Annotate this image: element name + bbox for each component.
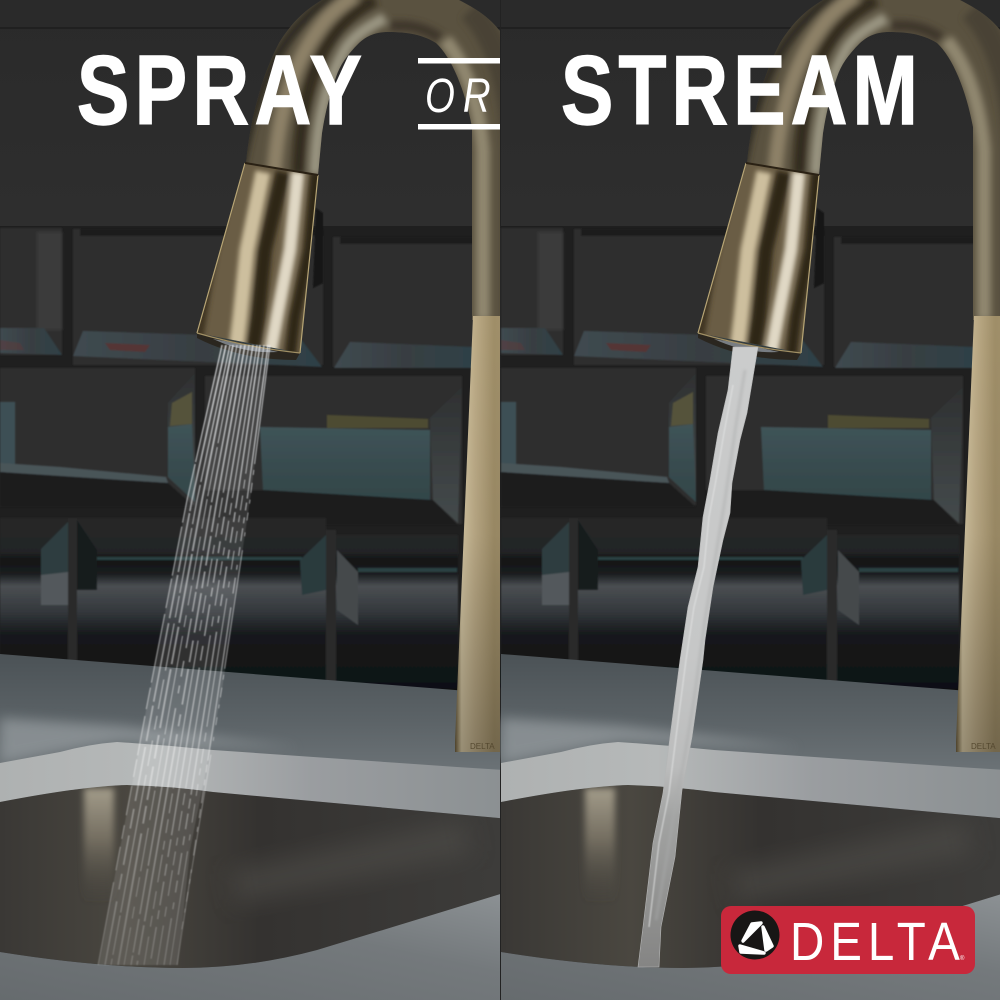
title: stream: STREAM bbox=[561, 36, 918, 145]
stream of water bbox=[638, 347, 758, 967]
spray water jets bbox=[98, 345, 270, 965]
counter lower edge bbox=[0, 888, 520, 1000]
countertop bbox=[0, 654, 520, 790]
pull-down spray head bbox=[190, 155, 330, 360]
kitchen scene repeated bbox=[501, 0, 1000, 1000]
faucet riser, lower bbox=[455, 316, 520, 752]
tile row three bbox=[0, 518, 458, 695]
left panel: spray photo bbox=[0, 0, 530, 1000]
faucet arc and upper riser bbox=[240, 0, 530, 325]
engraved brand mark on faucet: DELTA bbox=[470, 742, 495, 751]
tile row one bbox=[0, 228, 475, 368]
brand logo badge bbox=[721, 906, 975, 974]
title: or, between two rules bbox=[418, 58, 500, 130]
registered mark: ® bbox=[960, 955, 965, 962]
brand name: DELTA bbox=[790, 911, 960, 972]
title: or, between two rules: OR bbox=[425, 70, 491, 123]
title: spray: SPRAY bbox=[77, 36, 362, 145]
upper wall bbox=[0, 0, 520, 226]
icon: delta triangle mark bbox=[730, 910, 780, 960]
stainless sink basin bbox=[0, 785, 520, 968]
pull-down spray head handle bbox=[313, 208, 323, 288]
marble rim bbox=[0, 742, 520, 820]
kitchen scene: wall, tile, faucet, counter and sink bbox=[0, 0, 530, 1000]
tile row two bbox=[0, 368, 462, 525]
right panel: stream photo bbox=[501, 0, 1000, 1000]
